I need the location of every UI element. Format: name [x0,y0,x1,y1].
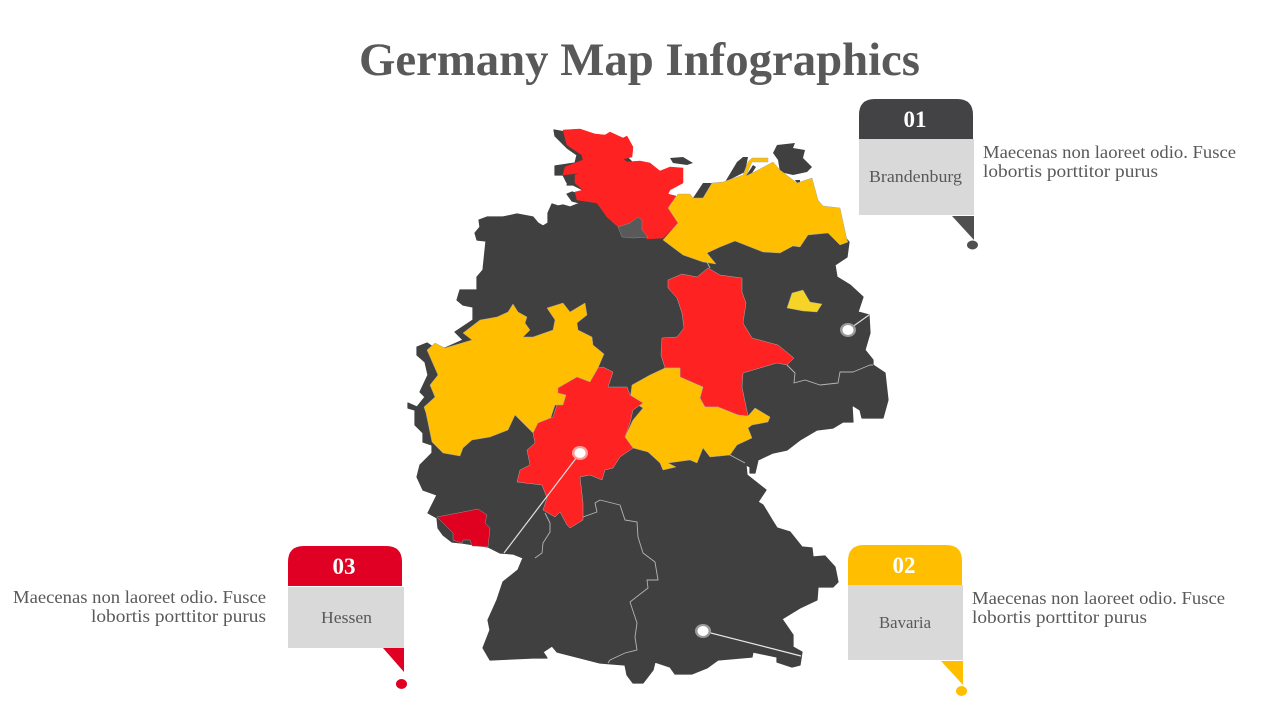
map base: dark country silhouette [408,130,888,683]
region: Berlin [787,290,822,312]
callout 02: Bavaria: 02 [892,553,916,578]
islands: Baltic and North Sea coast [670,143,812,198]
region: Schleswig-Holstein [563,129,683,239]
callout 03: Hessen [288,546,407,689]
region: North Rhine-Westphalia [424,303,604,456]
text: Hessen description [13,587,266,626]
region: Mecklenburg-Vorpommern [663,158,848,264]
callout 01: Brandenburg: 01 [904,107,926,132]
pin: Bavaria [695,624,801,656]
callout 02: Bavaria: Bavaria [879,613,931,632]
text: Bavaria description: lobortis porttitor purus [972,607,1147,627]
text: Bavaria description [972,588,1225,627]
title: Germany Map Infographics [359,34,920,86]
callout 01: Brandenburg [859,99,978,250]
callout 03: Hessen: 03 [332,554,356,579]
region: Saxony-Anhalt [661,268,794,416]
callout 01: Brandenburg: Brandenburg [869,167,963,186]
text: Brandenburg description: Maecenas non laoreet odio. Fusce [983,142,1236,162]
text: Brandenburg description [983,142,1236,181]
map of Germany [408,129,888,683]
pin: Hessen [504,446,588,553]
text: Brandenburg description: lobortis porttitor purus [983,161,1158,181]
region: Hesse [517,367,643,528]
region: Thuringia [625,368,770,470]
callout 02: Bavaria [848,545,967,696]
text: Hessen description: Maecenas non laoreet odio. Fusce [13,587,266,607]
text: Bavaria description: Maecenas non laoreet odio. Fusce [972,588,1225,608]
state borders [535,262,873,663]
callout 03: Hessen: Hessen [321,608,373,627]
text: Hessen description: lobortis porttitor purus [91,606,266,626]
pin: Brandenburg [840,315,869,337]
region: Hamburg [618,217,648,238]
region: Saarland [437,509,490,547]
